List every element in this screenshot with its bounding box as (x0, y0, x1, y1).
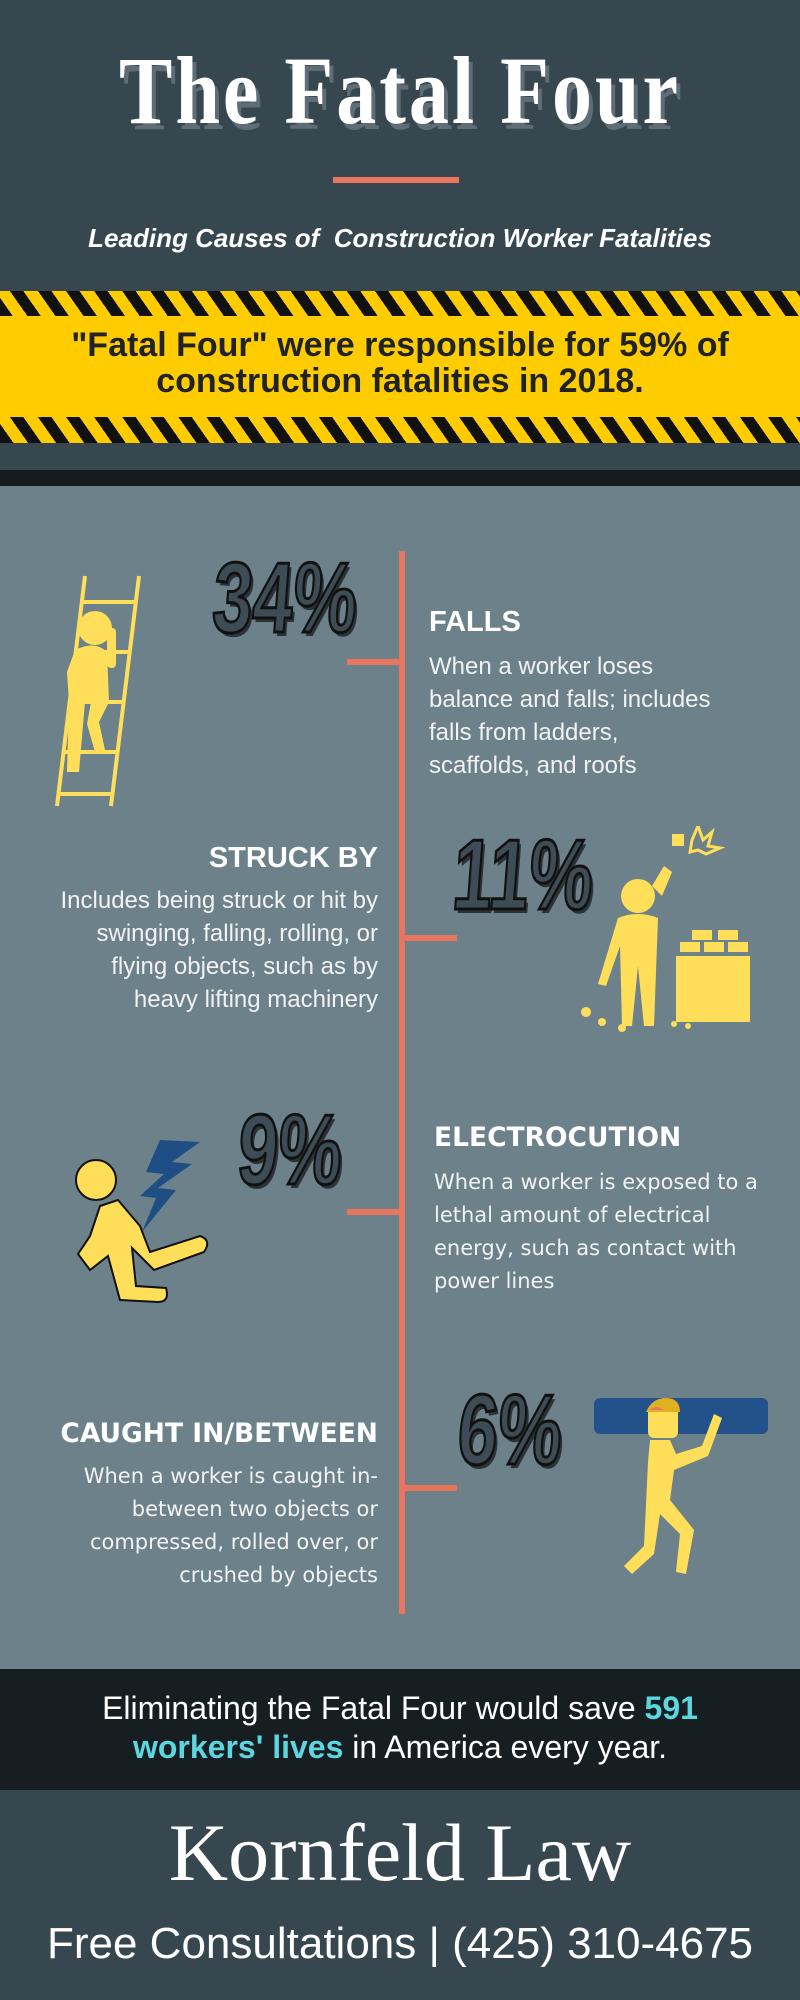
text: struck by: heavy lifting machinery (134, 986, 378, 1013)
icon: electrocuted worker (75, 1140, 208, 1303)
text: falls: falls from ladders, (429, 719, 618, 746)
heading: falls: FALLS (429, 606, 521, 638)
tick: caught (402, 1485, 457, 1491)
text: caught in/between (84, 1464, 378, 1587)
callout: lives saved: workers' lives in America every year. (133, 1729, 667, 1765)
title: The Fatal Four (119, 39, 681, 145)
text: electrocution: power lines (434, 1269, 554, 1293)
text: struck by: swinging, falling, rolling, or (97, 920, 378, 947)
icon: worker carrying pipe (594, 1398, 768, 1574)
percent: 6%: 6% (454, 1374, 567, 1486)
percent: 9%: 9% (234, 1094, 347, 1206)
text: caught in/between: crushed by objects (179, 1563, 378, 1587)
text: caught in/between: between two objects or (132, 1497, 378, 1521)
brand name: Kornfeld Law (169, 1807, 631, 1898)
icon: ladder climber (55, 576, 141, 806)
callout: lives saved (0, 1669, 800, 1790)
panel: causes (0, 486, 800, 1669)
footer (0, 1790, 800, 2000)
banner text: construction fatalities in 2018. (156, 362, 644, 400)
percent: 34%: 34% (209, 542, 362, 654)
lightning (140, 1140, 200, 1232)
heading: electrocution: ELECTROCUTION (434, 1122, 681, 1153)
text: caught in/between: When a worker is caught in- (84, 1464, 378, 1488)
tick: struck (402, 935, 457, 941)
heading: caught in/between: CAUGHT IN/BETWEEN (60, 1418, 378, 1449)
banner text (71, 326, 729, 400)
text: electrocution: When a worker is exposed to a (434, 1170, 758, 1194)
dark separator (0, 470, 800, 486)
timeline (399, 551, 405, 1614)
text: falls: When a worker loses (429, 653, 653, 680)
banner text: "Fatal Four" were responsible for 59% of (71, 326, 729, 364)
text: struck by (60, 887, 378, 1013)
text: electrocution (434, 1170, 758, 1293)
text: electrocution: energy, such as contact with (434, 1236, 737, 1260)
tick: electrocution (347, 1209, 402, 1215)
text: caught in/between: compressed, rolled over, or (90, 1530, 378, 1554)
header background (0, 0, 800, 470)
heading: struck by: STRUCK BY (209, 842, 378, 874)
subtitle: Leading Causes of Construction Worker Fatalities (88, 223, 712, 253)
text: struck by: Includes being struck or hit by (60, 887, 378, 914)
text: falls: scaffolds, and roofs (429, 752, 637, 779)
text: falls (429, 653, 711, 779)
hazard banner (0, 291, 800, 443)
contact: Free Consultations | (425) 310-4675 (47, 1919, 753, 1968)
text: electrocution: lethal amount of electrical (434, 1203, 710, 1227)
icon: struck worker (581, 826, 750, 1032)
callout: lives saved: Eliminating the Fatal Four would save 591 (102, 1690, 698, 1726)
percent: 11%: 11% (449, 819, 598, 931)
text: falls: balance and falls; includes (429, 686, 711, 713)
title underline (333, 177, 459, 183)
tick: falls (347, 659, 402, 665)
text: struck by: flying objects, such as by (111, 953, 378, 980)
